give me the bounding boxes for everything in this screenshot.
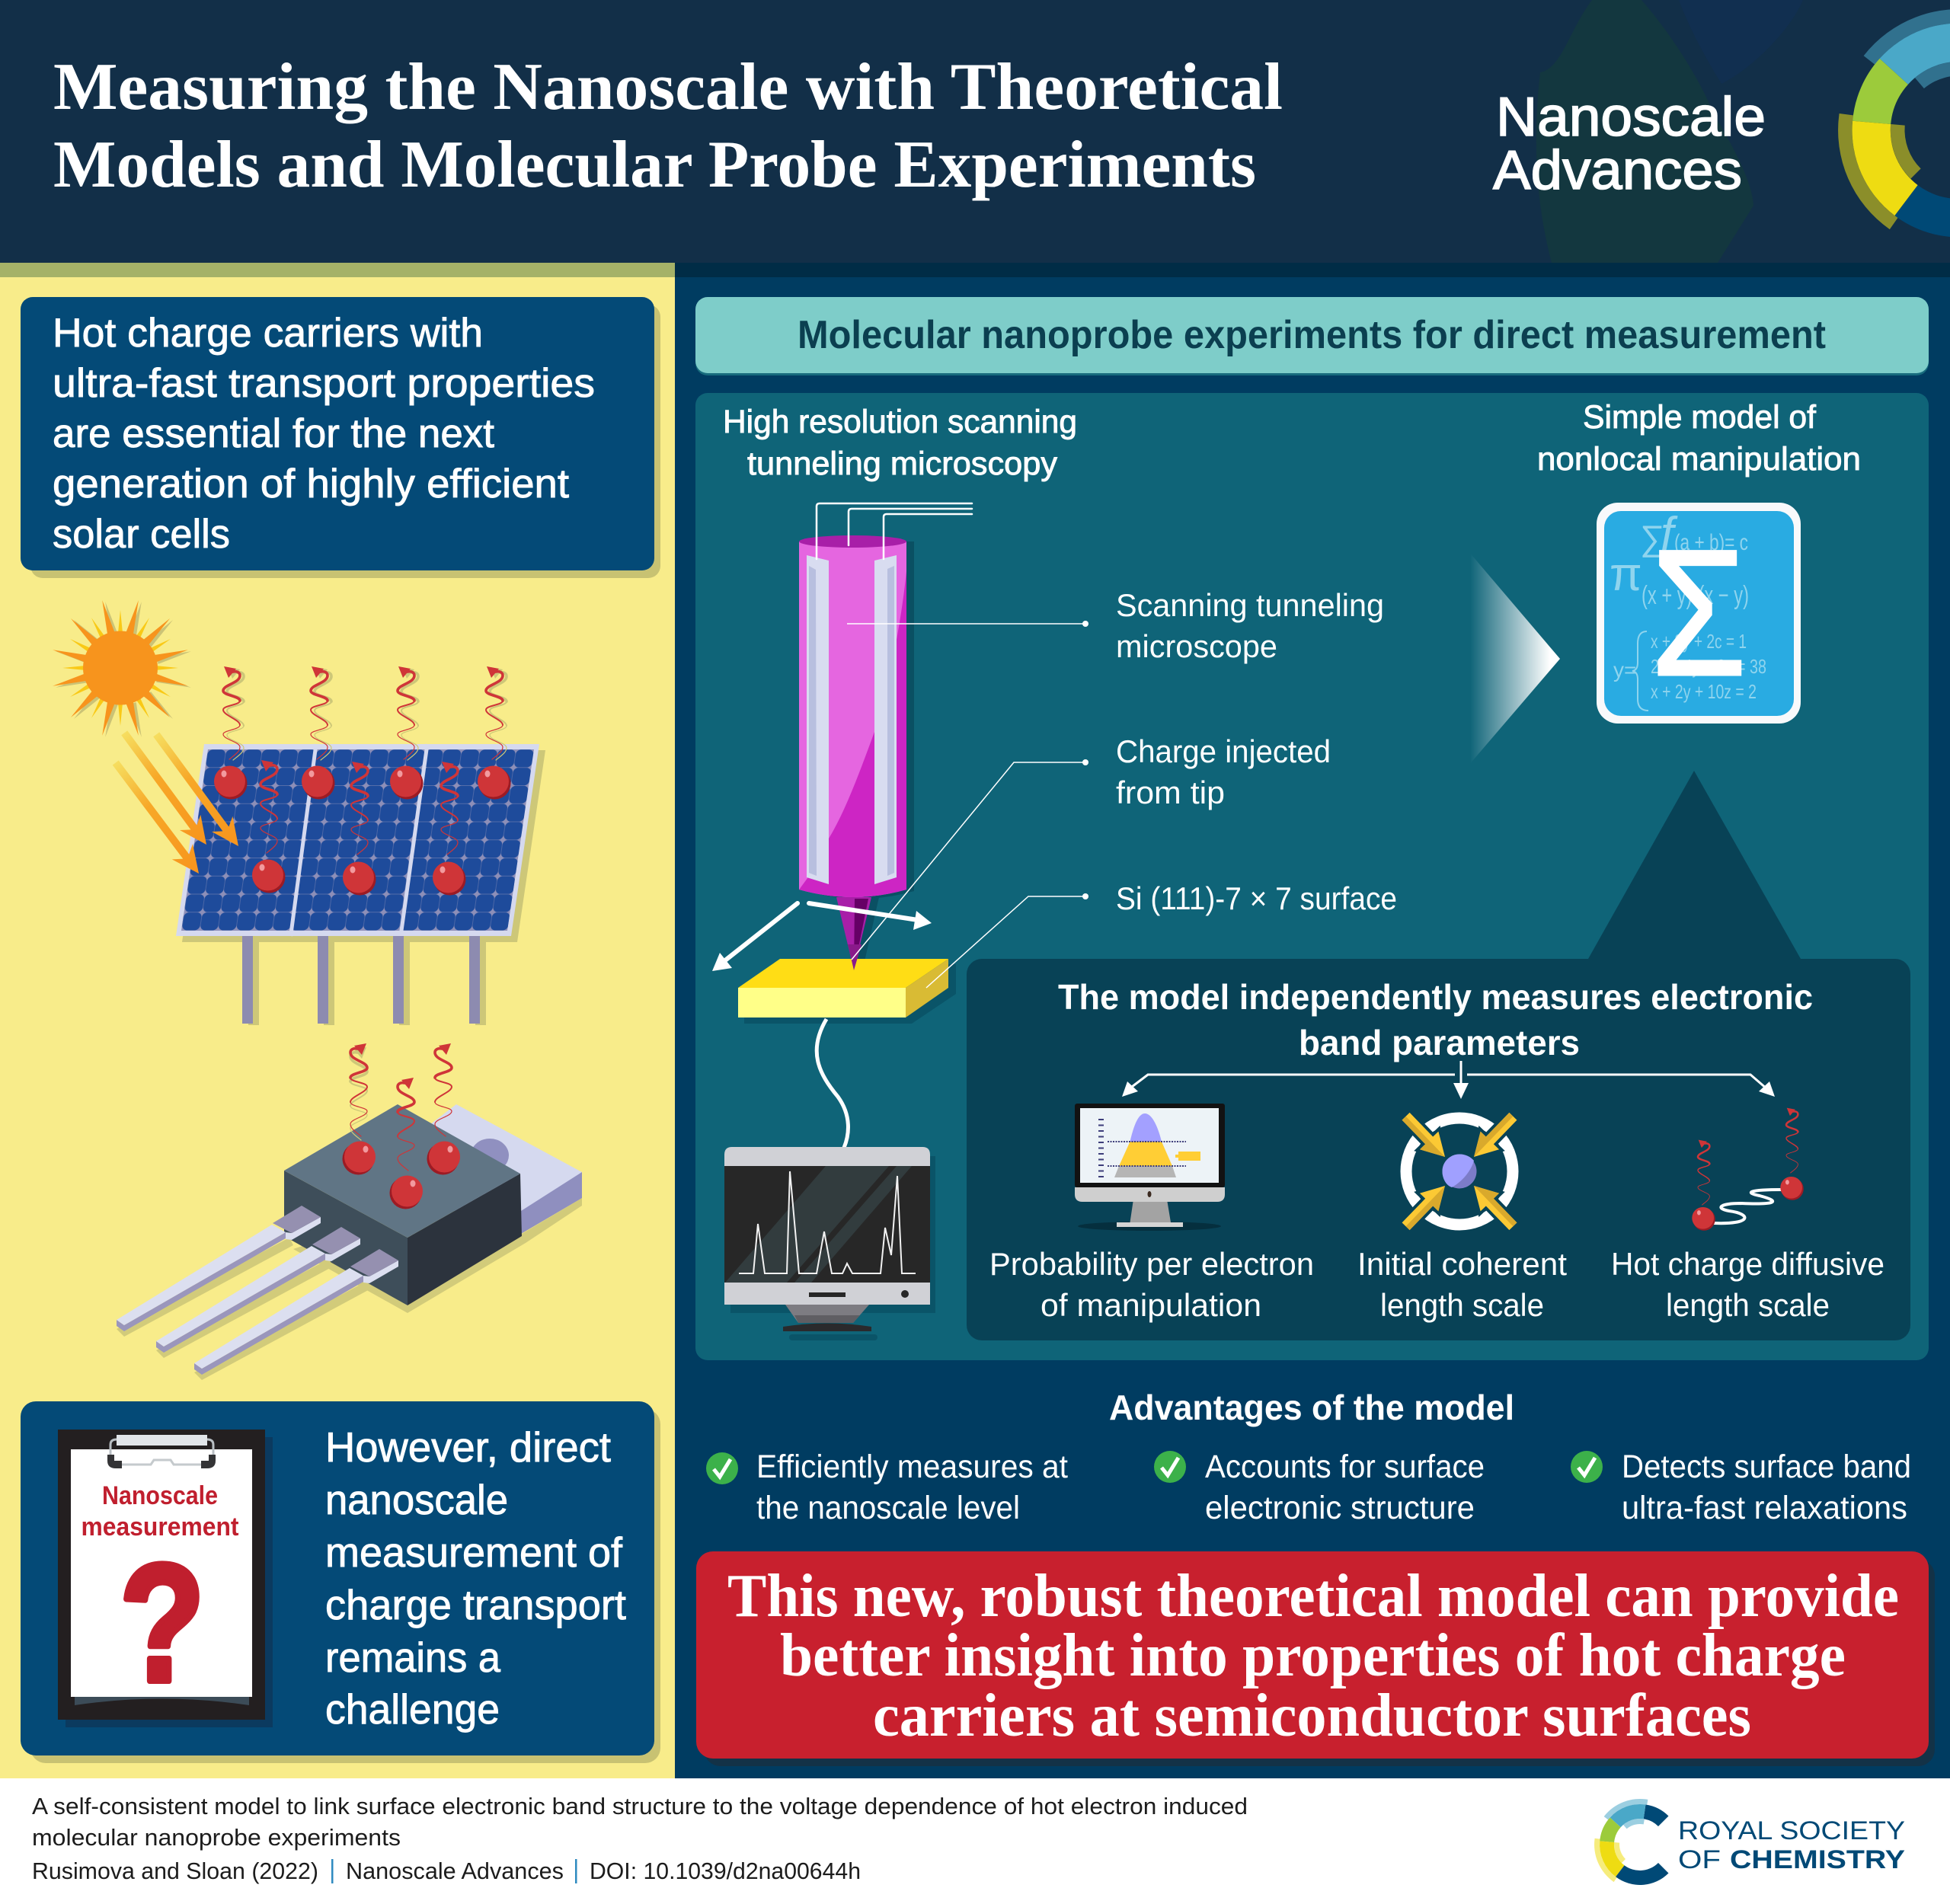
citation: Nanoscale Advances xyxy=(346,1858,564,1884)
header band xyxy=(0,0,1950,263)
citation xyxy=(32,1793,1248,1884)
logo: Royal Society of Chemistry xyxy=(1594,1799,1905,1885)
label: Si surface: Si (111)-7 × 7 surface xyxy=(1116,880,1397,916)
journal name: Advances xyxy=(1493,140,1742,201)
parameter label: coherent length xyxy=(1357,1246,1567,1323)
label: charge injected from tip xyxy=(852,733,1331,960)
heading: advantages: Advantages of the model xyxy=(1109,1388,1514,1427)
logo: Royal Society of Chemistry: CHEMISTRY xyxy=(1730,1845,1905,1874)
panel: measurement challenge xyxy=(21,1401,660,1763)
panel: hot charge carriers intro: ultra-fast transport properties xyxy=(53,361,595,406)
label: scanning tunneling microscope: Scanning tunneling xyxy=(1116,587,1384,623)
icon: math sigma card: π xyxy=(1610,548,1642,601)
panel: measurement challenge: nanoscale xyxy=(325,1476,508,1523)
icon: probability monitor xyxy=(1075,1104,1225,1231)
arrow: tip movement right xyxy=(809,903,932,930)
title: Measuring the Nanoscale with Theoretical xyxy=(53,50,1283,124)
label: Si surface xyxy=(926,880,1397,988)
hot charges with wavy arrows on transistor xyxy=(343,1043,460,1209)
panel: measurement challenge: measurement of xyxy=(325,1529,623,1576)
hot charges with wavy arrows on solar panel xyxy=(214,666,510,896)
citation: DOI: 10.1039/d2na00644h xyxy=(590,1858,861,1884)
label: charge injected from tip: from tip xyxy=(1116,775,1225,810)
citation: molecular nanoprobe experiments xyxy=(32,1824,401,1851)
label: scanning tunneling microscope: microscope xyxy=(1116,628,1277,664)
heading: model measures band parameters: The model independently measures electronic xyxy=(1058,977,1813,1017)
heading: simple model xyxy=(1537,399,1861,478)
advantage 2 xyxy=(1154,1449,1485,1526)
journal name: Nanoscale xyxy=(1496,87,1766,148)
panel: hot charge carriers intro: are essential for the next xyxy=(53,411,494,456)
heading: simple model: Simple model of xyxy=(1583,399,1817,436)
panel: experiments xyxy=(695,393,1929,1360)
callout: conclusion: This new, robust theoretical model can provide xyxy=(727,1563,1899,1630)
parameter label: diffusive length xyxy=(1611,1246,1884,1323)
heading: high resolution STM: tunneling microscopy xyxy=(747,446,1057,482)
parameter label: coherent length: Initial coherent xyxy=(1357,1246,1567,1282)
solar panel xyxy=(176,744,545,942)
icon: math sigma card: y= xyxy=(1613,658,1636,682)
advantage 2: electronic structure xyxy=(1205,1490,1475,1526)
icon: math sigma card xyxy=(1597,503,1801,724)
icon: math sigma card: x + 2y + 2c = 1 xyxy=(1651,630,1747,653)
icon: monitor with spectrum xyxy=(724,1147,935,1340)
panel: hot charge carriers intro: Hot charge carriers with xyxy=(53,311,483,356)
panel: hot charge carriers intro: solar cells xyxy=(53,512,230,557)
icon: hot charge diffusion xyxy=(1692,1108,1804,1231)
title: Models and Molecular Probe Experiments xyxy=(53,128,1256,202)
callout: conclusion: carriers at semiconductor surfaces xyxy=(873,1682,1751,1749)
parameter label: probability: of manipulation xyxy=(1041,1287,1261,1323)
parameter label: probability xyxy=(989,1246,1314,1323)
icon: clipboard xyxy=(58,1430,273,1727)
parameter label: diffusive length: length scale xyxy=(1666,1287,1830,1323)
advantage 1: the nanoscale level xyxy=(756,1490,1020,1526)
solar panel legs xyxy=(242,936,486,1025)
cable to monitor xyxy=(817,1019,848,1148)
advantage 3: Detects surface band xyxy=(1622,1449,1911,1485)
left column background xyxy=(0,263,675,1778)
journal logo xyxy=(1838,9,1950,237)
icon: silicon surface block xyxy=(738,944,956,1024)
icon: math sigma card: ∑ xyxy=(1640,518,1665,557)
icon: math sigma card: 2x + 4y + 6z = 38 xyxy=(1651,655,1766,678)
icon: math sigma card: (x + y)²(x − y) xyxy=(1642,581,1749,610)
icon: clipboard: measurement xyxy=(81,1513,239,1541)
icon: clipboard: ? xyxy=(120,1529,205,1717)
advantage 3 xyxy=(1571,1449,1911,1526)
logo: Royal Society of Chemistry: OF xyxy=(1678,1845,1721,1874)
right column background xyxy=(675,263,1950,1778)
icon: coherent length atom xyxy=(1396,1107,1523,1235)
label: scanning tunneling microscope xyxy=(847,587,1384,664)
title xyxy=(53,50,1283,202)
icon: math sigma card: f xyxy=(1661,508,1678,561)
heading: model measures band parameters: band parameters xyxy=(1299,1023,1580,1062)
citation: Rusimova and Sloan (2022) xyxy=(32,1858,318,1884)
callout: conclusion: better insight into properties of hot charge xyxy=(780,1622,1846,1689)
panel: measurement challenge: charge transport xyxy=(325,1581,626,1628)
label: charge injected from tip: Charge injected xyxy=(1116,733,1331,769)
heading: high resolution STM: High resolution scanning xyxy=(723,404,1077,440)
icon: math sigma card: (a + b)= c xyxy=(1674,530,1748,555)
parameter label: coherent length: length scale xyxy=(1380,1287,1544,1323)
footer background xyxy=(0,1778,1950,1904)
advantage 2: Accounts for surface xyxy=(1205,1449,1485,1485)
panel: measurement challenge: However, direct xyxy=(325,1423,611,1471)
callout: conclusion xyxy=(696,1551,1935,1766)
panel: hot charge carriers intro xyxy=(21,297,660,578)
heading: molecular nanoprobe experiments xyxy=(695,297,1929,375)
icon: math sigma card: Σ xyxy=(1651,513,1747,714)
arrow: tip movement left xyxy=(712,903,798,971)
journal name xyxy=(1493,87,1766,201)
advantage 1: Efficiently measures at xyxy=(756,1449,1068,1485)
advantage 1 xyxy=(706,1449,1068,1526)
arrows: branching to three parameters xyxy=(1122,1061,1775,1099)
advantage 3: ultra-fast relaxations xyxy=(1622,1490,1907,1526)
heading: high resolution STM xyxy=(723,404,1077,482)
icon: clipboard: Nanoscale xyxy=(102,1481,218,1510)
panel: measurement challenge: challenge xyxy=(325,1685,500,1733)
arrow: gradient chevron to model xyxy=(1469,551,1560,765)
panel: hot charge carriers intro: generation of highly efficient xyxy=(53,462,569,506)
logo: Royal Society of Chemistry: ROYAL SOCIETY xyxy=(1678,1816,1905,1845)
citation: A self-consistent model to link surface electronic band structure to the voltage dependence of hot electron induced xyxy=(32,1793,1248,1819)
transistor device xyxy=(117,1104,582,1380)
heading: simple model: nonlocal manipulation xyxy=(1537,441,1861,478)
icon: sun xyxy=(52,599,192,738)
icon: scanning tunneling microscope xyxy=(799,503,972,975)
parameter label: diffusive length: Hot charge diffusive xyxy=(1611,1246,1884,1282)
sunlight arrows xyxy=(105,725,249,881)
heading: model measures band parameters xyxy=(1058,977,1813,1062)
heading: molecular nanoprobe experiments: Molecular nanoprobe experiments for direct measurement xyxy=(798,313,1826,357)
icon: math sigma card: x + 2y + 10z = 2 xyxy=(1651,680,1757,703)
panel: measurement challenge: remains a xyxy=(325,1634,500,1681)
parameter label: probability: Probability per electron xyxy=(989,1246,1314,1282)
panel: band parameters xyxy=(967,771,1910,1340)
